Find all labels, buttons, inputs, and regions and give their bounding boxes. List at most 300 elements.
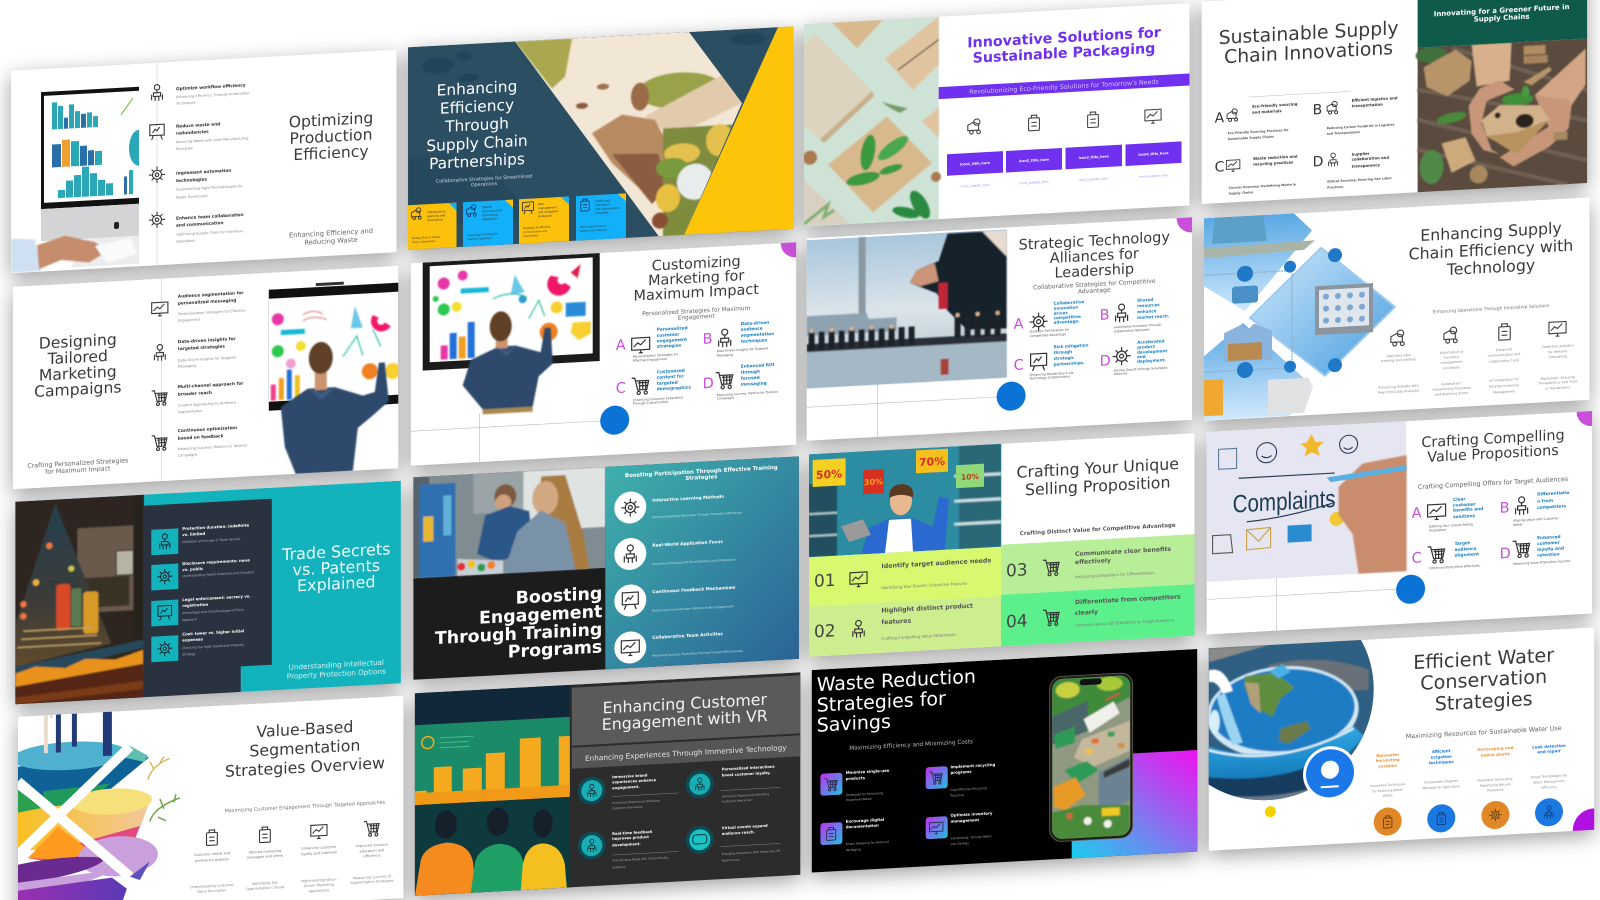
illustration: layered rainbow funnel with people xyxy=(12,708,180,900)
row 02 xyxy=(814,603,973,645)
item D: Campaigns xyxy=(717,396,734,401)
icon subtitles: icon3_subtitle_here xyxy=(1079,176,1108,182)
item: virtual events: Experiences xyxy=(722,858,740,863)
item B xyxy=(703,319,774,358)
card: improvement: Measuring Success in xyxy=(580,224,606,229)
title: Enhancing xyxy=(437,77,517,100)
list: marketing actions: Continuous optimization xyxy=(178,425,237,434)
corner accent xyxy=(1573,807,1600,851)
panel: comparison list: Approach xyxy=(182,617,197,622)
item C xyxy=(1215,154,1298,196)
subtitle: Maximizing Customer Engagement Through Targeted Approaches xyxy=(225,800,386,814)
labels: segmentation benefits: Enhanced customer xyxy=(301,845,337,851)
card: risk: Coordination xyxy=(523,234,539,238)
item D: focused xyxy=(741,375,760,382)
panel: comparison list: Definition and Scope of Trade Secrets xyxy=(182,537,241,544)
labels: technology capabilities: Real-time data xyxy=(1386,353,1411,358)
title: Waste Reduction xyxy=(817,666,976,696)
labels: segmentation benefits: Tailored marketing xyxy=(248,849,281,855)
item B: segmentation xyxy=(741,331,774,339)
item A: Clear xyxy=(1453,496,1466,503)
item D: messaging xyxy=(741,380,767,388)
subtitle: Personalized Strategies for Maximum xyxy=(642,306,751,318)
slide: Innovative Solutions for Sustainable Packaging xyxy=(803,3,1190,228)
item: inventory xyxy=(926,810,993,847)
panel heading: Strategies xyxy=(685,474,718,482)
labels: segmentation benefits: Measuring Success of xyxy=(353,874,392,880)
subtitle: Engagement xyxy=(678,314,715,322)
column: rainwater: Waste xyxy=(1383,793,1393,798)
item A: benefits and xyxy=(1453,506,1483,514)
column: rainwater: systems xyxy=(1378,763,1398,769)
item C: Enhancing Customer Experience xyxy=(633,395,683,402)
list: marketing actions: based on feedback xyxy=(178,433,224,442)
icon title boxes: icon3_title_here xyxy=(1079,154,1109,160)
item D: Ethical Sourcing: Ensuring Fair Labor xyxy=(1327,176,1392,184)
item C: Technology Collaborations xyxy=(1029,374,1071,381)
labels: segmentation benefits: Value Perception xyxy=(197,888,227,894)
panel: comparison list xyxy=(144,499,272,698)
item A: Defining Your Unique Selling xyxy=(1429,522,1473,529)
photo: hands holding kraft globe xyxy=(1416,38,1588,193)
item B: Messaging xyxy=(717,353,733,358)
item: recycling: programs xyxy=(950,769,972,775)
item A: A xyxy=(1412,505,1422,522)
corner accent xyxy=(1177,202,1207,233)
labels: segmentation benefits: Segmentation Criteria xyxy=(246,885,284,891)
icon subtitles xyxy=(960,173,1168,188)
row 02: Crafting Compelling Value Statements xyxy=(881,632,956,641)
item B xyxy=(1500,490,1570,528)
row 04: Communicating USP Effectively to Target Audience xyxy=(1075,617,1175,628)
item C: Communicating Value Effectively xyxy=(1429,563,1480,570)
panel: comparison list: Choosing the Right Intellectual Property xyxy=(182,643,244,650)
title: Savings xyxy=(817,711,891,737)
panel: comparison list: Understanding Patent Protection and Duration xyxy=(182,570,254,578)
item C: Through Customization xyxy=(632,400,669,406)
item A: Sustainable Supply Chains xyxy=(1228,135,1274,141)
subtitle: Reducing Waste xyxy=(304,236,358,247)
labels: segmentation benefits: Implementing Value- xyxy=(301,877,338,883)
card: risk xyxy=(519,197,569,244)
item D: Practices xyxy=(1327,185,1343,190)
icon subtitles: icon2_subtitle_here xyxy=(1019,180,1049,185)
list: efficiency actions: Faster Turnaround xyxy=(176,194,207,200)
slide: Boosting Engagement Through Training Programs xyxy=(413,456,799,680)
item: real-time feedback: improves product xyxy=(612,835,649,841)
item A: Competitive Advantage xyxy=(1030,332,1066,338)
item D: D xyxy=(1100,353,1111,370)
labels: technology capabilities: IoT Integration for xyxy=(1489,377,1520,383)
column: xeriscaping: native plants xyxy=(1481,751,1511,758)
list: marketing actions: Messaging xyxy=(178,364,196,369)
subtitle: Advantage xyxy=(1078,287,1111,296)
icon subtitles: icon4_subtitle_here xyxy=(1139,173,1168,179)
card: planning: Chain Collaboration xyxy=(412,240,436,244)
row 01: 01 xyxy=(814,571,836,592)
title: Strategies xyxy=(1435,687,1533,715)
labels: technology capabilities: for demand xyxy=(1548,349,1567,354)
slide: Waste Reduction Strategies for Savings xyxy=(812,649,1198,873)
slide: Efficient Water Conservation Strategies xyxy=(1159,566,1600,874)
item A: innovation xyxy=(1054,304,1078,311)
item B: Collaborative Networks xyxy=(1114,328,1150,334)
card: inventory: Seamless Operations xyxy=(467,237,493,241)
item: recycling: Implement recycling xyxy=(950,762,996,769)
item C: recycling practices xyxy=(1253,159,1294,167)
item A: competitive xyxy=(1054,314,1081,320)
title: Selling Proposition xyxy=(1025,473,1170,499)
item: real-time feedback: Transforming Retail with Virtual Reality xyxy=(611,855,669,863)
item: immersive brand experiences: engagement. xyxy=(612,785,640,790)
panel heading: Boosting Participation Through Effective Training xyxy=(625,465,778,479)
card: risk: and mitigation xyxy=(538,209,559,214)
item D: Measuring Value Proposition Success xyxy=(1513,559,1571,566)
item A: advantage. xyxy=(1054,318,1080,325)
column: rainwater: for Reducing Water xyxy=(1372,788,1404,793)
photo: hand writing Complaints on board xyxy=(1207,421,1407,582)
list: marketing actions: Engagement xyxy=(178,317,201,323)
illustration: bar chart and audience xyxy=(415,685,570,896)
blue circle xyxy=(600,405,629,435)
list: efficiency actions: Enhance team collaboration xyxy=(176,212,244,222)
card: improvement: initiatives xyxy=(595,210,609,215)
item B: n from xyxy=(1537,498,1554,505)
column: leak detection: Leak detection xyxy=(1532,743,1566,750)
item D: customer xyxy=(1537,540,1561,547)
card: improvement: Continuous xyxy=(595,198,611,203)
item A: Eco-friendly sourcing xyxy=(1252,101,1298,109)
list: marketing actions: personalized messaging xyxy=(178,298,236,307)
card: improvement xyxy=(576,193,626,241)
item: digital documentation: Smart Shopping for Reduced xyxy=(846,840,889,846)
slide: Crafting Compelling Value Propositions xyxy=(1207,395,1600,635)
title: Maximum Impact xyxy=(634,282,759,305)
panel: comparison list: Advantages and Disadvantages of Each xyxy=(182,608,244,615)
item B: market reach. xyxy=(1137,313,1170,320)
title: Efficient Water xyxy=(1413,643,1554,674)
item: digital documentation: Packaging xyxy=(846,847,861,852)
column: rainwater xyxy=(1370,752,1406,837)
icon title boxes: icon4_title_here xyxy=(1138,151,1169,157)
item A: engagement xyxy=(657,337,687,344)
panel: comparison list: Cost: lower vs. higher initial xyxy=(182,628,244,637)
labels: technology capabilities: Streamlining Processes xyxy=(1432,386,1471,392)
title: Crafting Compelling xyxy=(1421,427,1565,451)
item C: partnerships. xyxy=(1054,360,1085,367)
labels: technology capabilities: processes xyxy=(1443,365,1460,370)
labels: technology capabilities: tracking and visibility xyxy=(1381,357,1416,363)
labels: technology capabilities: inventory xyxy=(1444,355,1459,360)
title: Supply Chain xyxy=(426,132,528,155)
item: single-use products: Household Waste xyxy=(846,797,872,802)
yellow dot xyxy=(1265,806,1276,817)
item D: D xyxy=(1500,546,1511,563)
list: efficiency actions: redundancies xyxy=(176,129,209,137)
item B: Needs xyxy=(1513,522,1523,527)
corner accent xyxy=(781,226,811,258)
item D xyxy=(703,362,778,401)
item B: Shared xyxy=(1137,297,1154,303)
item D: through xyxy=(741,369,760,376)
subtitle: Collaborative Strategies for Streamlined xyxy=(436,174,532,185)
labels: technology capabilities: forecasting xyxy=(1549,354,1567,359)
subtitle band xyxy=(939,73,1190,99)
panel: subtitle band xyxy=(572,735,801,769)
title: Through xyxy=(444,114,509,136)
subtitle: Crafting Personalized Strategies xyxy=(27,457,128,470)
item C: audience xyxy=(1455,546,1477,553)
item C: through xyxy=(1054,349,1072,355)
icon: location pin network xyxy=(154,344,165,361)
item A: and materials xyxy=(1252,108,1282,115)
item C: Supply Chains xyxy=(1229,190,1253,196)
item D xyxy=(1100,338,1168,377)
title: Through Training xyxy=(435,620,602,649)
panel: title block: Enhancing Customer xyxy=(603,690,768,718)
banner xyxy=(1418,0,1588,48)
labels: technology capabilities: Predictive analytics xyxy=(1542,343,1574,349)
card: planning: forecasting xyxy=(427,217,443,222)
title: Production xyxy=(290,126,372,148)
list: efficiency actions: Techniques xyxy=(175,101,196,106)
photo: man drawing on colorful whiteboard xyxy=(269,279,401,476)
item D xyxy=(1313,150,1392,190)
row 04 xyxy=(1006,594,1181,632)
item D: retention xyxy=(1537,551,1560,559)
item B: techniques xyxy=(741,337,768,345)
title: Boosting xyxy=(516,584,602,609)
item C: Waste reduction and xyxy=(1253,154,1298,161)
item: inventory: management xyxy=(950,817,979,824)
item C xyxy=(1014,342,1089,382)
title: Efficiency xyxy=(293,142,369,164)
column: leak detection: and repair xyxy=(1537,748,1561,754)
row 04: clearly xyxy=(1075,609,1098,617)
gradient block xyxy=(1072,750,1198,859)
list: efficiency actions: Principles xyxy=(176,146,193,151)
labels: technology capabilities xyxy=(1378,343,1578,401)
item C: C xyxy=(1412,550,1422,567)
labels: technology capabilities: Enhancing Visibility with xyxy=(1379,384,1419,390)
title: Strategies for xyxy=(817,688,946,717)
item: inventory: Composting: Turning Waste xyxy=(950,834,992,840)
icon title boxes: icon1_title_here xyxy=(960,161,991,167)
title: Crafting Your Unique xyxy=(1016,454,1179,482)
icon: cart xyxy=(152,390,167,406)
item B: Leveraging Innovation through xyxy=(1114,323,1161,329)
icon: monitor xyxy=(152,302,168,316)
title: Enhancing Supply xyxy=(1420,218,1562,245)
item D: deployment. xyxy=(1137,357,1167,364)
panel: comparison list: Disclosure requirements: none xyxy=(182,557,250,566)
item: team activities xyxy=(614,625,743,664)
labels: segmentation benefits: loyalty and retention xyxy=(301,850,337,856)
item B: resources xyxy=(1137,302,1160,308)
card: improvement: evaluation xyxy=(595,202,610,207)
list: marketing actions: Segmentation xyxy=(178,409,202,414)
item: recycling: Cost-Effective Recycling xyxy=(950,786,987,792)
item: personalized interactions: Personalized interactions xyxy=(722,765,776,772)
photo: kraft boxes and green leaves xyxy=(803,17,941,228)
photo: people at interactive training table xyxy=(413,467,605,578)
slide: Trade Secrets vs. Patents Explained xyxy=(15,481,401,705)
item C xyxy=(616,368,691,407)
item: real-time feedback: Solutions xyxy=(612,865,626,870)
item D: D xyxy=(703,376,714,392)
list: marketing actions: broader reach xyxy=(178,390,212,398)
row 03: effectively xyxy=(1075,557,1111,566)
item A: A xyxy=(616,338,626,354)
card: inventory xyxy=(463,200,513,247)
panel: comparison list: Strategy xyxy=(182,652,196,657)
item D: Alliances xyxy=(1114,371,1128,376)
card: improvement: Supply Chain Alliances xyxy=(580,228,608,233)
list: efficiency actions: Operations xyxy=(176,239,195,244)
labels: segmentation benefits: Approaches xyxy=(309,888,329,893)
item A: Personalized xyxy=(657,325,688,333)
photo: desktop computer with charts and typing hands xyxy=(11,86,157,273)
list: efficiency actions: Enhancing Efficiency Through Automation xyxy=(176,91,249,99)
card: risk: Strategies for Effective xyxy=(523,226,551,230)
subtitle: Enhancing Operations Through Innovative Solutions xyxy=(1433,303,1550,315)
item C: alignment xyxy=(1455,551,1479,559)
title: Chain Innovations xyxy=(1224,38,1393,68)
labels: segmentation benefits: Improved resource xyxy=(355,843,388,848)
labels: technology capabilities: Automation of xyxy=(1440,350,1464,355)
column: rainwater: Innovative Techniques xyxy=(1370,782,1406,788)
list: efficiency actions: and communication xyxy=(176,220,224,229)
item: virtual events: Engaging Customers with Interactive VR xyxy=(722,849,780,856)
yellow wedge xyxy=(684,26,794,235)
item: virtual events: audience reach. xyxy=(722,830,756,836)
title: Programs xyxy=(508,638,602,663)
card: inventory: technology xyxy=(482,212,498,217)
row 02: features xyxy=(881,618,912,626)
row 03: Analyzing Competitors for Differentiation xyxy=(1075,570,1155,579)
labels: segmentation benefits: Understanding Customer xyxy=(190,883,234,889)
labels: technology capabilities: management xyxy=(1441,360,1463,365)
item A: Effective Engagement xyxy=(633,357,668,363)
item A: strategies xyxy=(657,343,682,350)
column: leak detection: Efficiency xyxy=(1541,785,1557,790)
card: inventory: resources and xyxy=(482,208,502,213)
list: marketing actions: targeted strategies xyxy=(178,344,225,352)
list: efficiency actions: Optimize workflow efficiency xyxy=(176,82,246,92)
item: single-use products: products xyxy=(846,775,866,781)
item: virtual events xyxy=(686,821,781,865)
slide: Strategic Technology Alliances for Leadership xyxy=(807,202,1207,441)
banner: Supply Chains xyxy=(1474,13,1530,24)
item D: collaboration and xyxy=(1352,155,1389,162)
item: virtual events: Virtual events expand xyxy=(722,824,768,830)
labels: technology capabilities: Real-Time Data Analytics xyxy=(1378,389,1419,395)
labels: technology capabilities: communication and xyxy=(1488,352,1520,358)
item B: audience xyxy=(741,326,763,333)
word on the board: Complaints xyxy=(1233,485,1336,519)
item D: Enhanced ROI xyxy=(741,362,775,370)
card: risk: Communication and xyxy=(523,230,548,234)
column: irrigation: Sustainable Irrigation xyxy=(1424,779,1458,785)
column: rainwater: harvesting xyxy=(1376,757,1400,763)
item: inventory: into Savings xyxy=(950,841,969,846)
item: feedback xyxy=(614,579,736,617)
item B: Efficient logistics and xyxy=(1352,95,1398,103)
title: Chain Efficiency with xyxy=(1409,236,1573,264)
title: Value-Based xyxy=(256,717,353,741)
title: Explained xyxy=(297,572,376,595)
title: Tailored xyxy=(47,347,108,368)
photo: business figures on reflective table xyxy=(807,229,1007,388)
row 02: 02 xyxy=(814,621,836,642)
item D: Supplier xyxy=(1352,151,1370,157)
labels: segmentation benefits: Driven Marketing xyxy=(304,882,334,888)
icon title boxes xyxy=(947,141,1182,176)
list: marketing actions: Multi-channel approach for xyxy=(178,381,244,390)
panel: title block xyxy=(572,675,801,746)
slide: Crafting Your Unique Selling Proposition xyxy=(809,433,1195,658)
photo: globe in water bowl xyxy=(1159,578,1389,816)
illustration: excited shopper with sale tags: 30% xyxy=(864,477,883,487)
column: irrigation xyxy=(1423,748,1460,833)
item: immersive brand experiences xyxy=(578,772,679,812)
item: interactive learning: Boosting Employee Motivation Through Interactive Workshops xyxy=(652,510,743,519)
item C: content for xyxy=(657,373,685,381)
title: Technology xyxy=(1446,255,1535,279)
column: irrigation: techniques xyxy=(1429,759,1454,765)
card: planning: Collaborative xyxy=(427,209,446,214)
list: efficiency actions: Implementing Agile Methodologies for xyxy=(176,184,243,192)
panel: comparison list: vs. limited xyxy=(182,531,206,537)
item D: product xyxy=(1137,344,1155,350)
list: marketing actions: Measuring Success: Metrics for Tailored xyxy=(178,443,247,451)
item: real-time feedback xyxy=(578,827,679,871)
subtitle: for Maximum Impact xyxy=(45,465,111,476)
illustration: excited shopper with sale tags: 70% xyxy=(919,455,945,469)
list: marketing actions: Campaigns xyxy=(178,453,198,458)
item: team activities: Collaborative Team Activities xyxy=(652,631,723,641)
icon subtitles: icon1_subtitle_here xyxy=(960,183,990,188)
blue circle xyxy=(1396,574,1425,605)
subtitle: Maximizing Efficiency and Minimizing Costs xyxy=(849,739,973,752)
photo: handshake over world map xyxy=(408,26,794,252)
item A xyxy=(1412,495,1483,534)
title: Sustainable Packaging xyxy=(973,41,1155,67)
panel: comparison list: expenses xyxy=(182,636,204,643)
title: Segmentation xyxy=(249,736,360,761)
item A: solutions xyxy=(1453,513,1476,520)
icon: automation gear xyxy=(149,166,165,183)
slide: Enhancing Efficiency Through Supply Chain Partnerships xyxy=(408,26,794,252)
illustration: excited shopper with sale tags: 50% xyxy=(816,467,842,482)
item: real-world application: Innovative Strategies for Team Building and Collaboration xyxy=(652,557,736,566)
item B: Reducing Carbon Footprint in Logistics xyxy=(1327,123,1395,130)
phone with isometric recycling scene xyxy=(1050,673,1133,842)
card: planning: Building Trust in Supply xyxy=(412,236,441,240)
row 01: Identifying Your Brand's Distinctive Features xyxy=(881,581,967,590)
item B: B xyxy=(1313,102,1322,118)
item C: targeted xyxy=(657,380,678,387)
panel: subtitle band: Enhancing Experiences Through Immersive Technology xyxy=(585,743,787,763)
icons xyxy=(1391,320,1566,346)
item C: C xyxy=(1014,357,1024,374)
item D: Driving Growth through Synergistic xyxy=(1114,366,1168,373)
list: efficiency actions: technologies xyxy=(176,176,207,184)
item C: C xyxy=(616,381,626,397)
item A: customer xyxy=(657,332,680,339)
item A: Strategic Partnerships for xyxy=(1030,327,1070,334)
item: digital documentation: Encourage digital xyxy=(846,817,884,824)
